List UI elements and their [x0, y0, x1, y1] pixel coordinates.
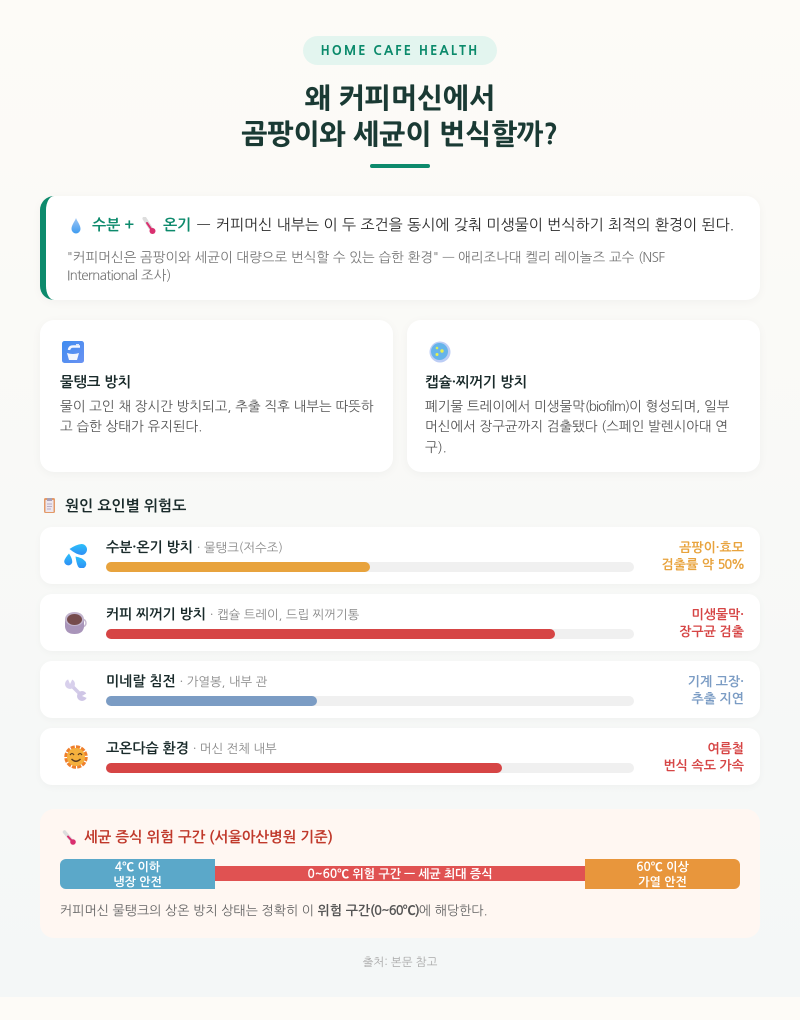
bar — [106, 763, 634, 773]
row value: 곰팡이·효모 — [679, 541, 744, 554]
title underline — [370, 164, 430, 168]
card text: 구). — [425, 440, 447, 454]
icon: thermometer — [62, 830, 76, 845]
row value — [663, 742, 744, 772]
card text: 물이 고인 채 장시간 방치되고, 추출 직후 내부는 따뜻하 — [60, 399, 374, 413]
icon: wrench — [65, 680, 86, 701]
row: mineral deposits — [40, 661, 760, 718]
bar — [106, 562, 634, 572]
panel: water tank card — [40, 320, 393, 472]
callout quote — [67, 250, 665, 282]
row: coffee grounds — [40, 594, 760, 651]
card text: 폐기물 트레이에서 미생물막(biofilm)이 형성되며, 일부 — [425, 399, 729, 413]
row value: 장구균 검출 — [679, 625, 744, 638]
segment: cold safe — [60, 859, 215, 889]
segment: danger zone — [215, 866, 585, 881]
bar — [106, 696, 634, 706]
segment: cold safe: 4℃ 이하 — [115, 861, 160, 873]
row value — [662, 541, 744, 571]
panel: bacteria danger zone — [40, 809, 760, 938]
segment: danger zone: 0~60℃ 위험 구간 — 세균 최대 증식 — [308, 868, 492, 880]
icon: sweat drops — [64, 544, 87, 568]
row label: 커피 찌꺼기 방치 · 캡슐 트레이, 드립 찌꺼기통 — [106, 608, 359, 622]
row: hot and humid environment — [40, 728, 760, 785]
card heading: 물탱크 방치 — [60, 376, 131, 390]
card text: 머신에서 장구균까지 검출됐다 (스페인 발렌시아대 연 — [425, 419, 728, 433]
icon: clipboard — [44, 498, 55, 513]
icon: coffee cup — [65, 612, 87, 634]
panel: capsule card — [407, 320, 760, 472]
bar — [106, 629, 634, 639]
icon: faucet — [62, 341, 84, 363]
row value: 미생물막· — [691, 608, 744, 621]
row value — [688, 675, 744, 705]
badge: HOME CAFE HEALTH — [303, 36, 497, 65]
segment: hot safe: 가열 안전 — [638, 876, 687, 888]
icon: thermometer — [142, 217, 156, 234]
row label: 수분·온기 방치 · 물탱크(저수조) — [106, 541, 283, 555]
title: 곰팡이와 세균이 번식할까? — [241, 120, 559, 148]
source note: 출처: 본문 참고 — [363, 956, 437, 968]
icon: water drop — [72, 218, 80, 234]
badge: HOME CAFE HEALTH: HOME CAFE HEALTH — [321, 44, 479, 57]
card text: 고 습한 상태가 유지된다. — [60, 419, 202, 433]
title — [241, 84, 559, 148]
icon: smiling sun — [64, 745, 88, 769]
callout main text continued: 온기 — 커피머신 내부는 이 두 조건을 동시에 갖춰 미생물이 번식하기 최적의 환경이 된다. — [163, 218, 734, 233]
row value — [679, 608, 744, 638]
panel note: 커피머신 물탱크의 상온 방치 상태는 정확히 이 위험 구간(0~60℃)에 해당한다. — [60, 904, 488, 917]
title: 왜 커피머신에서 — [305, 84, 495, 112]
segment: hot safe — [585, 859, 740, 889]
callout quote: International 조사) — [67, 268, 171, 282]
callout main text: 수분 + — [92, 218, 134, 233]
temperature bar — [60, 859, 740, 889]
segment: hot safe: 60℃ 이상 — [636, 861, 689, 873]
row value: 추출 지연 — [691, 692, 744, 705]
row value: 여름철 — [707, 742, 744, 755]
panel heading: 세균 증식 위험 구간 (서울아산병원 기준) — [84, 831, 333, 845]
row label: 미네랄 침전 · 가열봉, 내부 관 — [106, 675, 267, 689]
card text — [425, 399, 730, 454]
icon: petri dish — [430, 342, 450, 362]
card heading: 캡슐·찌꺼기 방치 — [425, 376, 527, 390]
row label: 고온다습 환경 · 머신 전체 내부 — [106, 742, 277, 756]
row value: 검출률 약 50% — [662, 558, 744, 571]
card text — [60, 399, 374, 433]
heading text: 원인 요인별 위험도 — [65, 499, 186, 514]
callout quote: "커피머신은 곰팡이와 세균이 대량으로 번식할 수 있는 습한 환경" — 애리조나대 켈리 레이놀즈 교수 (NSF — [67, 250, 665, 264]
row value: 번식 속도 가속 — [663, 759, 744, 772]
segment: cold safe: 냉장 안전 — [113, 876, 162, 888]
section heading: risk by cause — [44, 498, 186, 514]
panel: intro callout — [40, 196, 760, 300]
row value: 기계 고장· — [688, 675, 744, 688]
row: moisture and warmth — [40, 527, 760, 584]
